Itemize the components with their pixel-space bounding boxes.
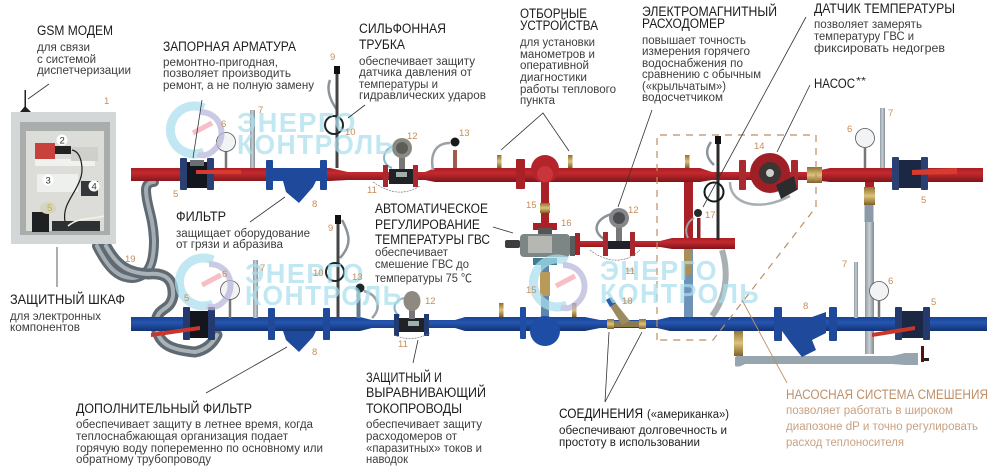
label: automatic temperature control: температуры 75 ℃	[375, 273, 472, 285]
mixing leader line	[742, 300, 787, 383]
label: filter: защищает оборудование	[176, 228, 310, 240]
part numbers: 5	[173, 189, 178, 200]
callout numbers in cabinet: 4	[92, 182, 97, 192]
bellows pressure sensor top	[325, 66, 343, 168]
label: electromagnetic flowmeter: водоснабжения по	[642, 58, 743, 70]
blue return main pipe	[131, 317, 987, 331]
label: automatic temperature control	[375, 201, 490, 285]
red supply main pipe	[131, 168, 983, 182]
label: electromagnetic flowmeter	[642, 4, 777, 104]
part numbers: 7	[888, 108, 893, 119]
strainer top	[266, 160, 327, 203]
leader lines	[28, 17, 810, 402]
label: automatic temperature control: АВТОМАТИЧЕСКОЕ	[375, 201, 488, 216]
label: couplings	[559, 406, 729, 449]
label: bellows tube: ТРУБКА	[359, 37, 405, 52]
part numbers: 7	[842, 259, 847, 270]
label: temperature sensor	[814, 1, 955, 55]
label: protective cabinet: для электронных	[10, 311, 101, 323]
part numbers: 8	[312, 199, 317, 210]
label: electromagnetic flowmeter: сравнению с обычным	[642, 69, 761, 81]
part numbers: 11	[398, 339, 408, 350]
label: tapping devices: ОТБОРНЫЕ	[520, 6, 587, 21]
label: tapping devices: работы теплового	[520, 84, 616, 96]
label: electromagnetic flowmeter: РАСХОДОМЕР	[642, 16, 725, 31]
part numbers: 10	[313, 268, 324, 279]
label: temperature sensor: фиксировать недогрев	[814, 43, 945, 55]
label: couplings: СОЕДИНЕНИЯ	[559, 406, 643, 421]
cable bundle 19	[97, 182, 217, 352]
label: protective bonding wires: обеспечивает защиту	[366, 419, 482, 431]
part numbers: 7	[258, 105, 263, 116]
label: bellows tube: гидравлических ударов	[359, 90, 486, 102]
part numbers: 1	[104, 96, 109, 107]
label: protective bonding wires: ЗАЩИТНЫЙ И	[366, 370, 442, 385]
label: mixing pump system: диапозоне dP и точно регулировать	[786, 421, 978, 433]
label: temperature sensor: позволяет замерять	[814, 19, 922, 31]
flowmeter middle	[597, 208, 635, 256]
label: GSM modem: GSM МОДЕМ	[37, 23, 113, 38]
part numbers: 9	[330, 52, 335, 63]
shut-off valve bottom left	[151, 307, 215, 340]
label: additional filter: обратному трубопроводу	[76, 454, 211, 466]
label: tapping devices: пункта	[520, 95, 556, 107]
label: tapping devices: УСТРОЙСТВА	[520, 18, 598, 33]
label: bellows tube	[359, 21, 486, 102]
label: filter	[176, 209, 310, 251]
label: couplings: обеспечивают долговечность и	[559, 425, 727, 437]
electrical cabinet	[11, 90, 116, 244]
part numbers: 12	[628, 205, 639, 216]
label: protective bonding wires	[366, 370, 486, 466]
label: protective cabinet	[10, 292, 125, 334]
label: automatic temperature control: РЕГУЛИРОВАНИЕ	[375, 217, 480, 232]
label: shut-off valves: позволяет производить	[163, 68, 291, 80]
label: additional filter: обеспечивает защиту в летнее время, когда	[76, 419, 314, 431]
label: protective cabinet: ЗАЩИТНЫЙ ШКАФ	[10, 292, 125, 307]
label: GSM modem	[37, 23, 131, 77]
part numbers: 8	[312, 347, 317, 358]
label: shut-off valves: ЗАПОРНАЯ АРМАТУРА	[163, 39, 296, 54]
part numbers: 13	[459, 128, 470, 139]
label: bellows tube: температуры и	[359, 79, 438, 91]
part numbers: 6	[847, 124, 852, 135]
part numbers: 6	[888, 276, 893, 287]
regulator body	[505, 223, 580, 265]
part numbers: 5	[931, 297, 936, 308]
bonding wires	[373, 182, 640, 339]
label: tapping devices: манометров и	[520, 49, 595, 61]
watermark wordmark: КОНТРОЛЬ	[237, 129, 395, 160]
label: tapping devices: оперативной	[520, 60, 589, 72]
callout numbers in cabinet	[42, 134, 100, 214]
bellows pressure sensor bottom	[326, 215, 348, 318]
watermark wordmark: ЭНЕРГО	[237, 107, 357, 138]
watermark wordmark	[237, 107, 395, 160]
thermowell rods	[250, 108, 885, 318]
mixing strainer 18 and couplings	[606, 297, 646, 329]
watermark ring	[170, 106, 222, 155]
part numbers: 11	[625, 266, 635, 277]
label: protective bonding wires: расходомеров от	[366, 431, 458, 443]
label: electromagnetic flowmeter: повышает точность	[642, 35, 746, 47]
label: pump: НАСОС	[814, 76, 855, 91]
label: mixing pump system: позволяет работать в широком	[786, 405, 953, 417]
label: filter: от грязи и абразива	[176, 239, 284, 251]
watermark logo middle: ЭНЕРГО	[245, 258, 365, 289]
watermark logo top	[170, 106, 395, 160]
label: additional filter: теплоснабжающая организация подает	[76, 431, 289, 443]
watermark logo right: ЭНЕРГО	[600, 255, 718, 286]
label: mixing pump system	[786, 387, 988, 449]
shut-off valve bottom right	[872, 307, 930, 340]
part numbers: 5	[184, 293, 189, 304]
part numbers: 12	[425, 296, 436, 307]
label: protective bonding wires: ВЫРАВНИВАЮЩИЙ	[366, 385, 486, 400]
part numbers: 17	[705, 210, 716, 221]
part numbers: 7	[260, 263, 265, 274]
differential regulator red dome	[516, 155, 559, 189]
label: GSM modem: диспетчеризации	[37, 65, 131, 77]
callout numbers in cabinet: 2	[60, 136, 65, 146]
lower blue dome	[520, 307, 560, 346]
callout numbers in cabinet: 5	[47, 203, 52, 214]
label: protective bonding wires: наводок	[366, 454, 409, 466]
pressure gauges	[216, 128, 888, 318]
label: automatic temperature control: ТЕМПЕРАТУРЫ ГВС	[375, 232, 490, 247]
temperature sensor 13 upper	[432, 138, 460, 170]
part numbers: 10	[345, 127, 356, 138]
label: temperature sensor: температуру ГВС и	[814, 31, 914, 43]
label: temperature sensor: ДАТЧИК ТЕМПЕРАТУРЫ	[814, 1, 955, 16]
part numbers: 5	[921, 195, 926, 206]
label: electromagnetic flowmeter: водосчетчиком	[642, 92, 723, 104]
watermark logo middle: КОНТРОЛЬ	[245, 280, 403, 311]
label: tapping devices: для установки	[520, 37, 595, 49]
label: protective cabinet: компонентов	[10, 322, 80, 334]
part numbers: 15	[526, 285, 537, 296]
part numbers: 6	[222, 269, 227, 280]
label: electromagnetic flowmeter: ЭЛЕКТРОМАГНИТНЫЙ	[642, 4, 777, 19]
label: couplings: простоту в использовании	[559, 437, 700, 449]
shut-off valve top left	[180, 158, 241, 190]
label: GSM modem: с системой	[37, 54, 96, 66]
mixing circuit pressure sensor 17	[686, 136, 724, 240]
branch pipes between mains	[540, 176, 875, 356]
label: shut-off valves	[163, 39, 314, 92]
flowmeter upper	[383, 138, 418, 187]
lower red mixing branch	[575, 238, 735, 249]
label: filter: ФИЛЬТР	[176, 209, 226, 224]
label: bellows tube: СИЛЬФОННАЯ	[359, 21, 446, 36]
watermark logo middle	[179, 258, 403, 311]
label: protective bonding wires: «паразитных» токов и	[366, 443, 482, 455]
circulation pump	[730, 153, 822, 205]
label: electromagnetic flowmeter: измерения горячего	[642, 46, 750, 58]
label: shut-off valves: ремонт, а не полную замену	[163, 80, 314, 92]
label: automatic temperature control: смешение ГВС до	[375, 259, 469, 271]
label: additional filter	[76, 401, 323, 466]
part numbers: 13	[352, 272, 363, 283]
antenna	[20, 90, 31, 112]
label: additional filter: горячую воду попеременно по основному или	[76, 443, 323, 455]
part numbers: 15	[526, 200, 537, 211]
strainer bottom right	[774, 307, 837, 357]
label: additional filter: ДОПОЛНИТЕЛЬНЫЙ ФИЛЬТР	[76, 401, 252, 416]
label: couplings: («американка»)	[647, 409, 729, 421]
label: shut-off valves: ремонтно-пригодная,	[163, 57, 278, 69]
tapping fittings	[497, 155, 690, 317]
label: tapping devices: диагностики	[520, 72, 587, 84]
temperature sensor 13 lower	[356, 284, 378, 318]
part numbers: 16	[561, 218, 572, 229]
part numbers: 19	[125, 254, 136, 265]
label: tapping devices	[520, 6, 616, 107]
watermark logo right: КОНТРОЛЬ	[600, 278, 760, 309]
label: GSM modem: для связи	[37, 42, 90, 54]
part numbers: 6	[221, 119, 226, 130]
label: electromagnetic flowmeter: («крыльчатым»)	[642, 81, 726, 93]
label: pump: **	[856, 76, 866, 87]
watermark logo right	[533, 255, 760, 309]
part numbers: 9	[328, 223, 333, 234]
callout numbers in cabinet: 3	[46, 176, 51, 186]
part numbers: 11	[367, 185, 377, 196]
shut-off valve top right	[892, 157, 957, 190]
mixing circuit dashed outline	[657, 135, 816, 340]
label: protective bonding wires: ТОКОПРОВОДЫ	[366, 401, 462, 416]
part numbers: 18	[622, 296, 633, 307]
part numbers: 8	[803, 301, 808, 312]
label: bellows tube: датчика давления от	[359, 67, 473, 79]
label: automatic temperature control: обеспечивает	[375, 247, 449, 259]
label: mixing pump system: расход теплоносителя	[786, 437, 904, 449]
flowmeter lower	[394, 291, 429, 336]
part numbers: 14	[754, 141, 765, 152]
strainer bottom left	[268, 308, 330, 352]
part numbers: 12	[407, 131, 418, 142]
grey bypass pipe	[735, 346, 929, 367]
label: bellows tube: обеспечивает защиту	[359, 56, 475, 68]
part numbers	[104, 52, 936, 358]
